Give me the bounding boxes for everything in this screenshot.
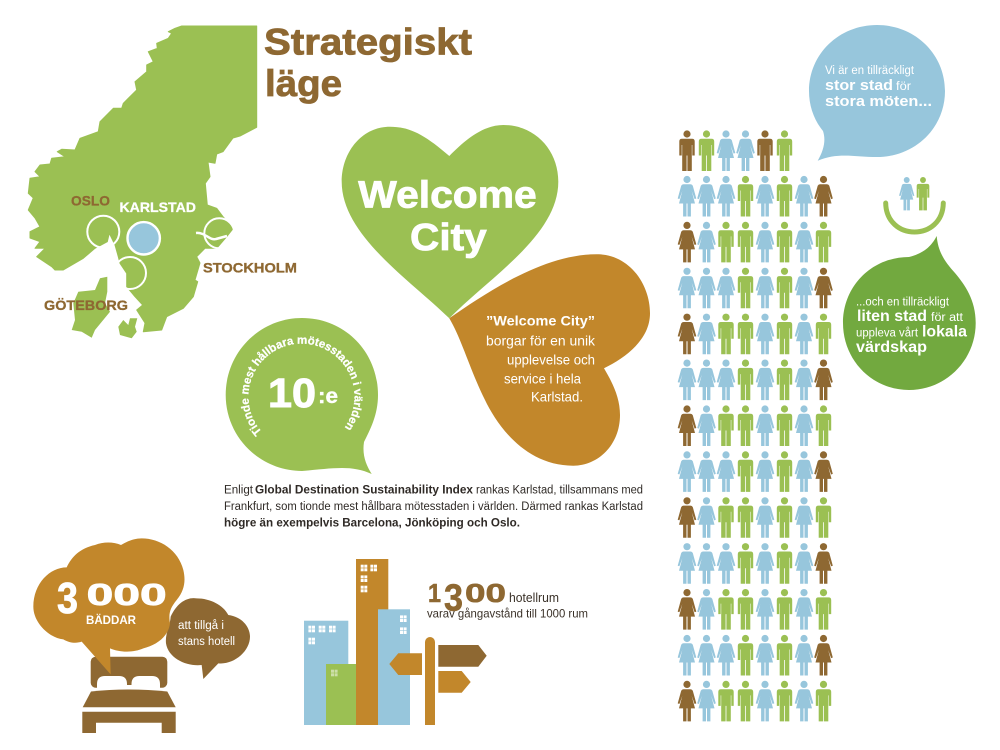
cloud bubble: att tillgå i stans hotell bbox=[166, 598, 250, 679]
cloud bubble: 3000 bäddar bbox=[33, 538, 184, 674]
label: Oslo: OSLO bbox=[71, 192, 110, 208]
cloud bubble: att tillgå i stans hotell: stans hotell bbox=[178, 636, 235, 648]
small ochre arrow bbox=[438, 671, 471, 693]
label: Göteborg: GÖTEBORG bbox=[44, 297, 128, 313]
dark green speech bubble: liten stad bbox=[857, 308, 927, 325]
headboard bbox=[91, 657, 167, 688]
ochre heart: description: ”Welcome City” bbox=[486, 313, 595, 329]
speech bubble: 10:e bbox=[226, 318, 378, 474]
map landmass bbox=[28, 26, 257, 332]
ochre heart: description bbox=[449, 254, 650, 466]
green building bbox=[326, 664, 356, 725]
bed icon bbox=[82, 657, 176, 733]
Stockholm inlet bbox=[196, 233, 227, 239]
speech bubble: 10:e: Tionde mest hållbara mötesstaden i världen bbox=[240, 336, 363, 438]
couple icon bbox=[899, 177, 929, 210]
paragraph: Global Destination Sustainability Index: rankas Karlstad, tillsammans med bbox=[476, 484, 643, 496]
hotel rooms text: 3 bbox=[444, 578, 463, 620]
cloud bubble: 3000 bäddar: 000 bbox=[87, 577, 167, 612]
title: läge bbox=[265, 63, 342, 104]
left blue building bbox=[304, 621, 348, 725]
green heart: Welcome City bbox=[342, 125, 558, 318]
Karlstad marker bbox=[128, 222, 160, 254]
ochre heart: description: borgar för en unik bbox=[486, 333, 596, 349]
map island: Zealand bbox=[118, 318, 137, 338]
cloud bubble: att tillgå i stans hotell: att tillgå i bbox=[178, 620, 224, 632]
blue speech bubble: stora möten... bbox=[825, 93, 932, 110]
hotel rooms text: 00 bbox=[465, 578, 506, 608]
ochre heart: description: upplevelse och bbox=[507, 351, 595, 367]
label: Stockholm: STOCKHOLM bbox=[203, 259, 297, 275]
people top row bbox=[679, 130, 792, 171]
cloud bubble: 3000 bäddar: BÄDDAR bbox=[86, 614, 137, 627]
hotel rooms text bbox=[427, 578, 588, 621]
dark green speech bubble: värdskap bbox=[856, 339, 927, 356]
blue speech bubble: Vi är en tillräckligt bbox=[825, 65, 915, 77]
brown arrow bbox=[438, 645, 487, 667]
title: Strategiskt bbox=[264, 22, 472, 62]
smile arc bbox=[886, 203, 943, 232]
paragraph: Global Destination Sustainability Index: Enligt bbox=[224, 484, 254, 496]
Stockholm ring bbox=[204, 218, 234, 248]
Göteborg ring bbox=[114, 257, 146, 289]
green heart: Welcome City: Welcome bbox=[358, 174, 537, 216]
cloud bubble: 3000 bäddar: 3 bbox=[57, 574, 78, 623]
ochre heart: description: Karlstad. bbox=[531, 388, 583, 404]
bed frame bbox=[82, 712, 176, 733]
dark green speech bubble: för att bbox=[931, 312, 964, 324]
left arrow bbox=[389, 653, 422, 675]
dark green speech bubble bbox=[843, 236, 976, 390]
title bbox=[264, 22, 472, 104]
dark green speech bubble: uppleva vårt bbox=[856, 328, 919, 340]
dark green speech bubble: ...och en tillräckligt bbox=[856, 297, 950, 309]
ochre heart: description: service i hela bbox=[504, 370, 581, 386]
hotel rooms text: varav gångavstånd till 1000 rum bbox=[427, 607, 588, 621]
pillows bbox=[97, 676, 160, 692]
Oslo ring bbox=[87, 216, 119, 248]
windows bbox=[308, 565, 407, 676]
map: southern Scandinavia bbox=[28, 26, 297, 338]
smile with couple bbox=[886, 177, 943, 232]
tall ochre building bbox=[356, 559, 388, 725]
paragraph: Global Destination Sustainability Index: Frankfurt, som tionde mest hållbara mötesstaden i världen. Därmed rankas Karlstad bbox=[224, 501, 643, 513]
buildings bbox=[304, 559, 410, 725]
people pictogram grid bbox=[678, 130, 833, 721]
paragraph: Global Destination Sustainability Index: högre än exempelvis Barcelona, Jönköping och Oslo. bbox=[224, 518, 520, 530]
paragraph: Global Destination Sustainability Index bbox=[224, 484, 643, 530]
right blue building bbox=[378, 609, 410, 725]
speech bubble: 10:e: :e bbox=[318, 385, 338, 408]
blue speech bubble: för bbox=[896, 81, 911, 93]
map island: Jutland bbox=[72, 277, 110, 338]
mattress bbox=[83, 690, 176, 707]
green heart: Welcome City: City bbox=[410, 217, 487, 259]
hotel rooms text: 1 bbox=[428, 578, 441, 608]
speech bubble: 10:e: 10 bbox=[268, 370, 316, 416]
signpost bbox=[389, 637, 487, 725]
post bbox=[425, 637, 435, 725]
blue speech bubble bbox=[809, 25, 945, 161]
hotel rooms text: hotellrum bbox=[509, 591, 559, 605]
label: Karlstad: KARLSTAD bbox=[120, 199, 196, 215]
dark green speech bubble: lokala bbox=[922, 324, 967, 341]
paragraph: Global Destination Sustainability Index: Global Destination Sustainability Index bbox=[255, 484, 474, 496]
blue speech bubble: stor stad bbox=[825, 77, 893, 94]
